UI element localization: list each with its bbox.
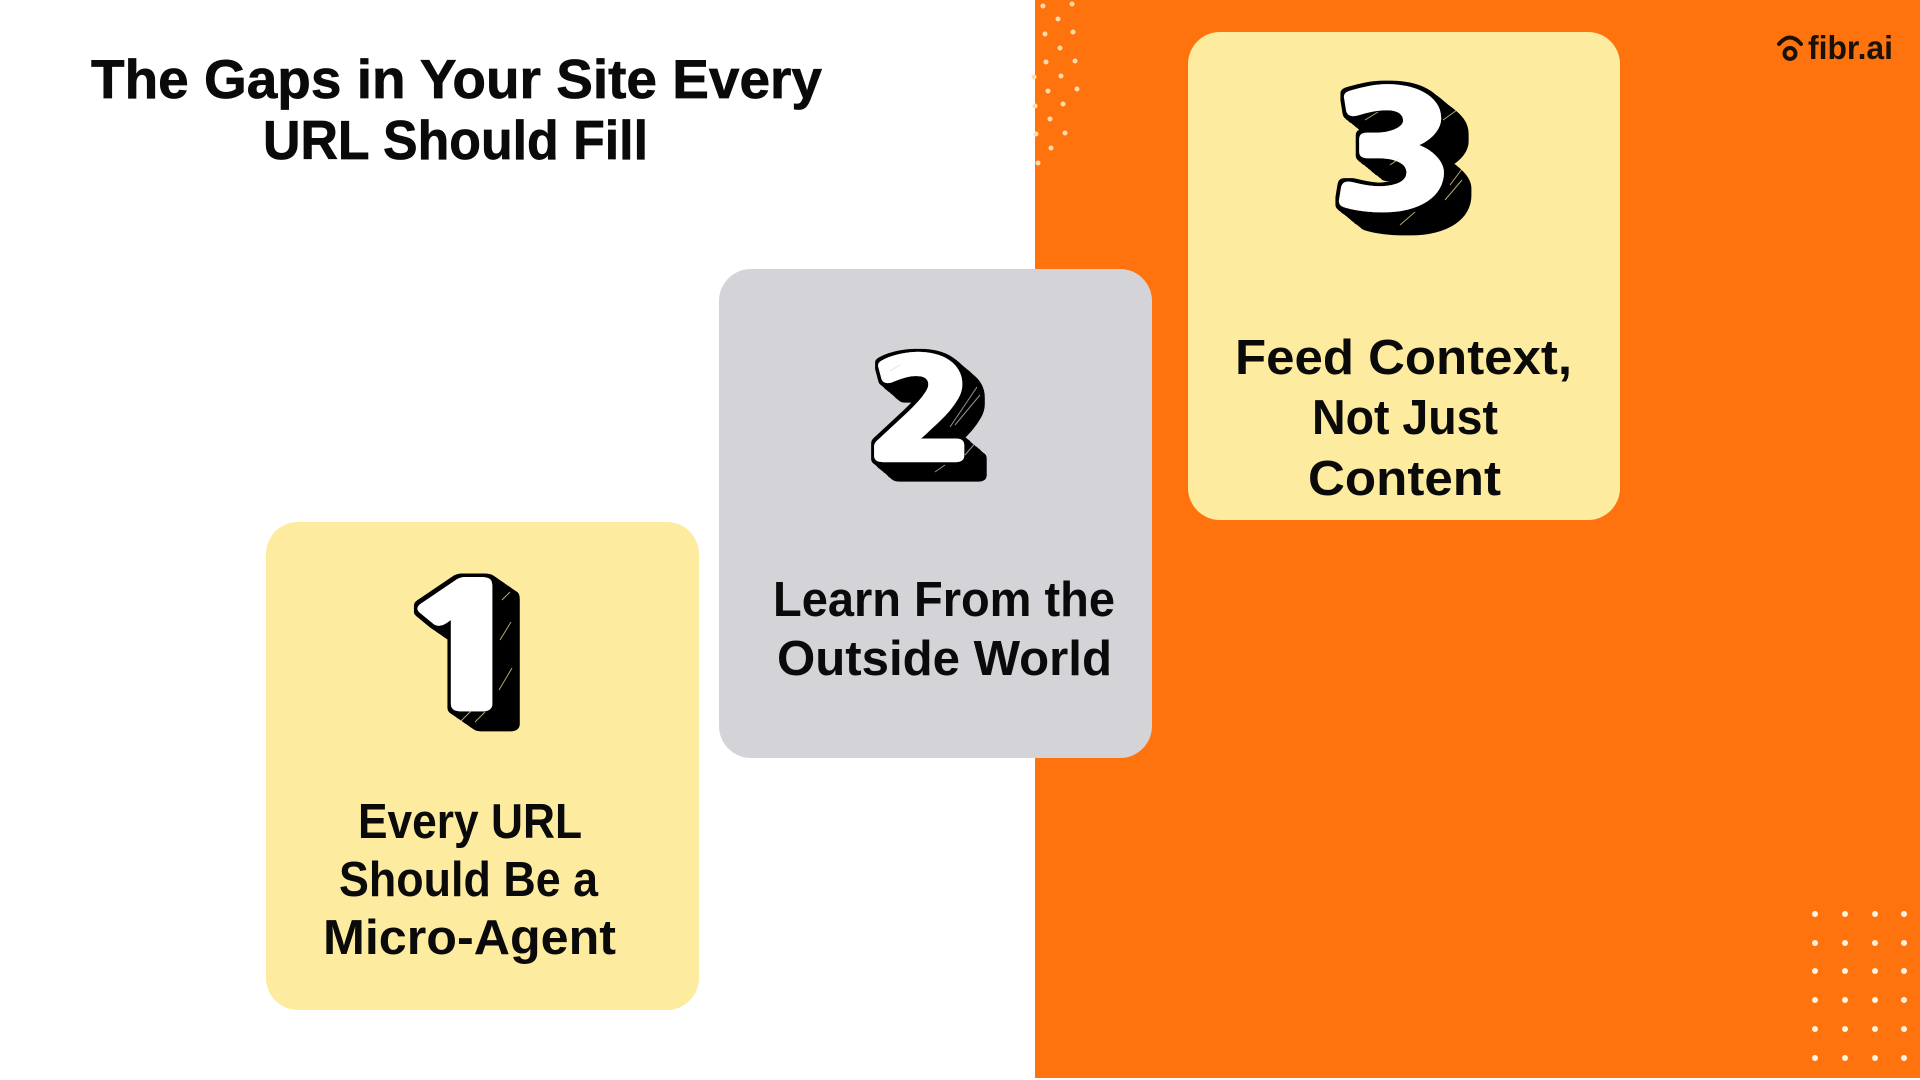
title: URL Should Fill — [263, 109, 648, 171]
card 3 label: Content — [1308, 452, 1501, 506]
card 2 label: Learn From the — [773, 573, 1115, 627]
icon: logo mark — [1779, 38, 1801, 59]
number 2: 2 — [870, 346, 974, 478]
title — [91, 48, 822, 171]
decorative dots: top left of orange panel — [1032, 2, 1080, 166]
panel: card 1 — [266, 522, 699, 1010]
panel: card 2 — [719, 269, 1152, 758]
logo: fibr.ai — [1779, 29, 1893, 66]
panel: card 3 — [1188, 32, 1620, 520]
hatching on number 2 — [890, 365, 980, 472]
hatching on number 1 — [460, 592, 512, 722]
card 1 label: Micro-Agent — [323, 911, 616, 965]
card 2 label — [773, 573, 1115, 686]
card 2 label: Outside World — [777, 632, 1112, 686]
number 1: 1 — [399, 568, 535, 731]
card 3 label: Not Just — [1312, 391, 1498, 445]
hatching on number 3 — [1365, 110, 1465, 225]
card 3 label: Feed Context, — [1235, 331, 1572, 385]
number 3: 3 — [1333, 77, 1453, 228]
card 1 label — [323, 795, 616, 965]
title: The Gaps in Your Site Every — [91, 48, 822, 110]
logo wordmark: fibr.ai — [1808, 29, 1893, 66]
card 1 label: Every URL — [358, 795, 582, 849]
decorative dots: bottom right of orange panel — [1812, 911, 1907, 1061]
card 1 label: Should Be a — [339, 853, 599, 907]
card 3 label — [1235, 331, 1572, 506]
orange background panel — [1035, 0, 1920, 1078]
